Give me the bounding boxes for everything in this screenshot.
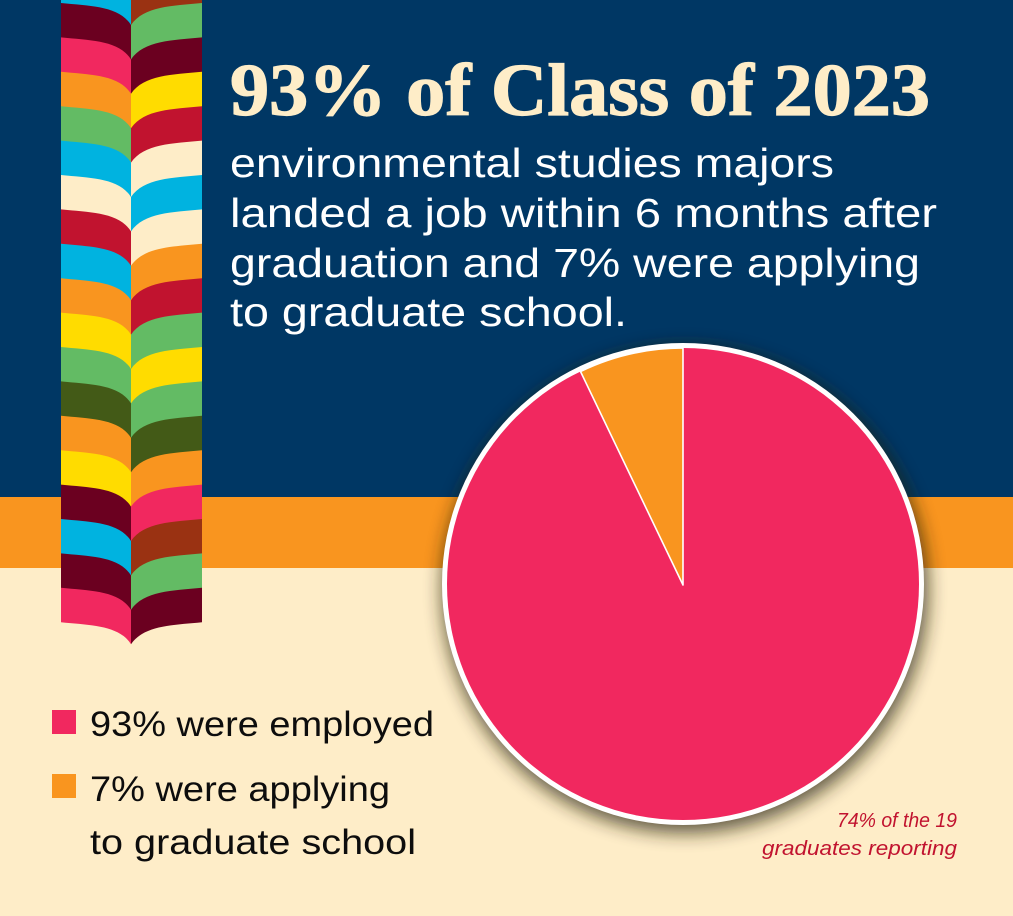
legend: [52, 705, 434, 862]
body text: landed a job within 6 months after: [230, 190, 937, 236]
body text: graduation and 7% were applying: [230, 240, 920, 286]
footnote: 74% of the 19: [837, 809, 957, 832]
decorative ribbon: [61, 0, 202, 644]
legend item: employed: 93% were employed: [90, 705, 434, 744]
legend item: applying to graduate school: 7% were applying: [90, 770, 390, 809]
footnote: [762, 809, 958, 860]
pie slice: 7% applying to graduate school: [580, 348, 683, 585]
title: 93% of Class of 2023: [230, 50, 930, 132]
footnote: graduates reporting: [762, 837, 958, 860]
legend item: applying to graduate school: to graduate school: [90, 823, 416, 862]
body text: [230, 140, 937, 335]
pie chart: [442, 343, 928, 833]
body text: to graduate school.: [230, 289, 627, 335]
legend item: applying to graduate school: [52, 770, 416, 862]
body text: environmental studies majors: [230, 140, 834, 186]
